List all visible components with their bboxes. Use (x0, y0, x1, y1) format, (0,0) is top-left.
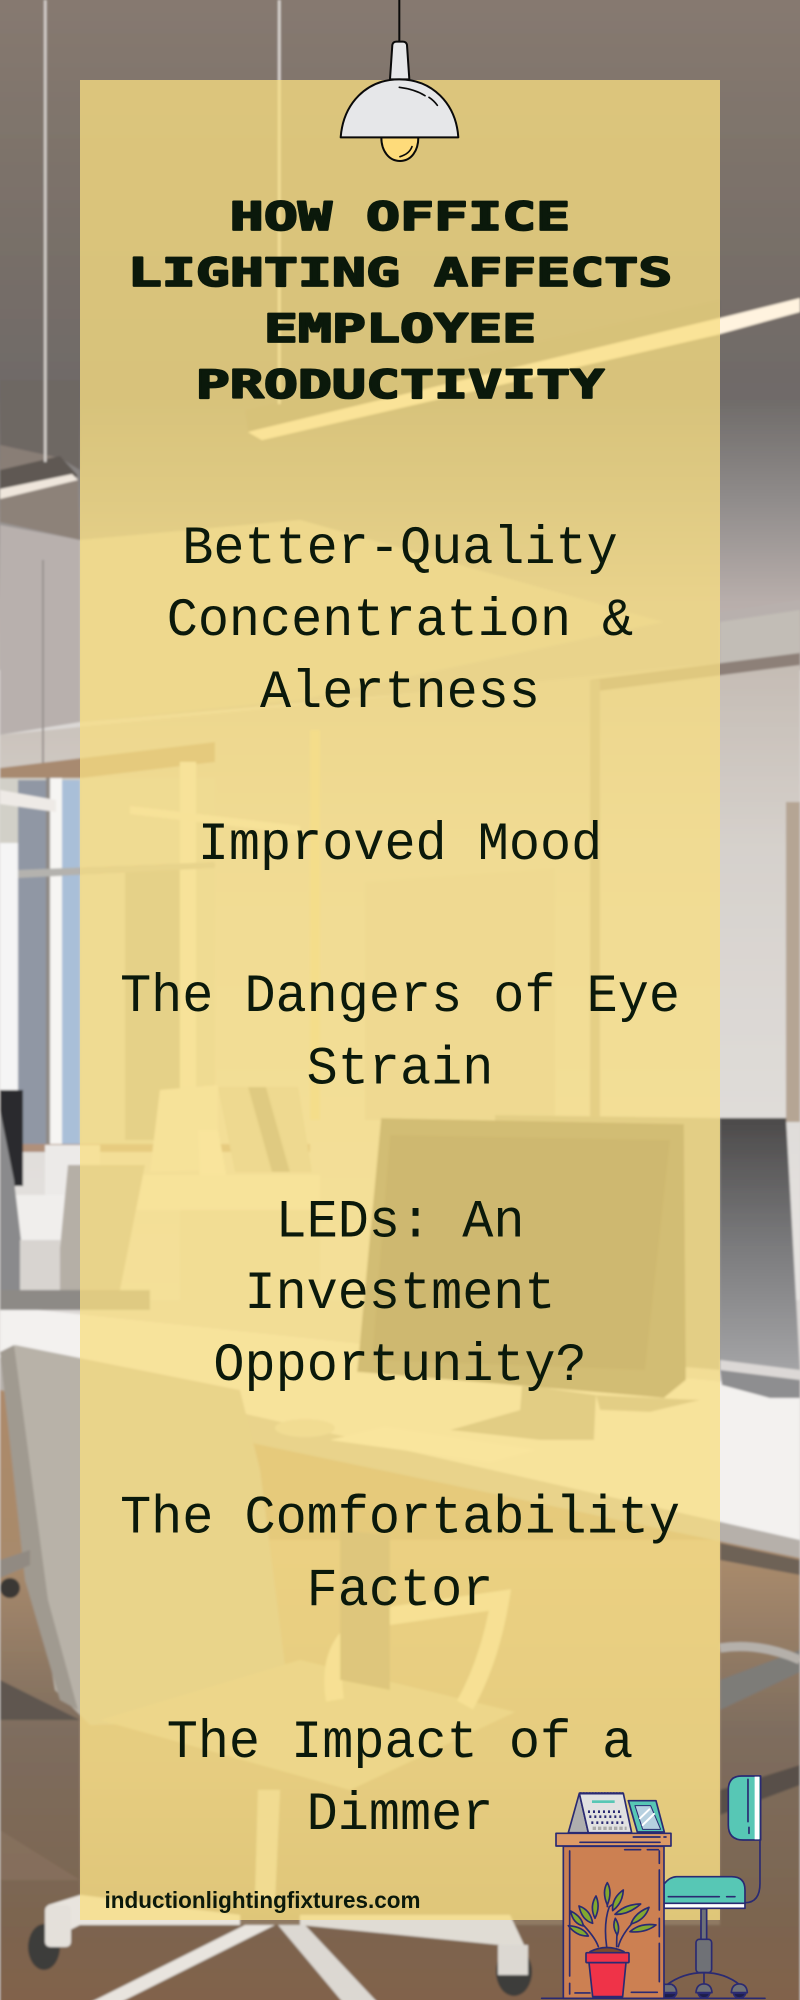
text block: better-quality concentration (167, 518, 633, 723)
chair back (728, 1776, 761, 1903)
text block: LEDs: Opportunity? (213, 1335, 587, 1396)
title: EMPLOYEE (264, 307, 536, 352)
text block: eye strain: Strain (307, 1039, 493, 1100)
plant pot (586, 1947, 629, 1997)
text block: better-quality concentration: Alertness (260, 662, 540, 723)
text block: LEDs: LEDs: An (276, 1192, 524, 1253)
title (128, 195, 672, 408)
text block: eye strain (120, 966, 680, 1100)
text block: comfortability: The Comfortability (120, 1488, 680, 1549)
chair seat (664, 1877, 745, 1908)
text block: better-quality concentration: Concentration & (167, 590, 633, 651)
lamp shade (341, 79, 458, 137)
text block: dimmer: The Impact of a (167, 1712, 633, 1773)
text block: comfortability (120, 1488, 680, 1621)
desk top (556, 1833, 671, 1846)
text block: better-quality concentration: Better-Quality (182, 518, 618, 579)
title: LIGHTING AFFECTS (128, 251, 672, 296)
desk details (570, 1837, 666, 1994)
text block: comfortability: Factor (307, 1560, 493, 1621)
chair stem and base (664, 1909, 747, 1998)
text block: LEDs (213, 1192, 587, 1396)
text block: improved mood: Improved Mood (198, 814, 602, 875)
title: HOW OFFICE (230, 195, 570, 240)
lamp cord (396, 0, 402, 42)
lamp bulb (381, 137, 418, 161)
panel: translucent yellow column (80, 80, 720, 1920)
ground line (542, 1996, 765, 2000)
shade highlights (399, 87, 437, 157)
website url: inductionlightingfixtures.com (104, 1887, 420, 1913)
lamp neck (390, 42, 409, 79)
text block: dimmer: Dimmer (307, 1784, 493, 1845)
title: PRODUCTIVITY (196, 363, 605, 408)
text block: dimmer (167, 1712, 633, 1845)
plant (568, 1883, 656, 1947)
text block: eye strain: The Dangers of Eye (120, 966, 680, 1027)
phone stand (628, 1801, 664, 1832)
text block: LEDs: Investment (244, 1263, 556, 1324)
calendar (568, 1793, 632, 1833)
desk body (563, 1846, 664, 1998)
icon: desk with plant, calendar and chair (542, 1776, 765, 1998)
icon: pendant lamp (341, 0, 458, 161)
